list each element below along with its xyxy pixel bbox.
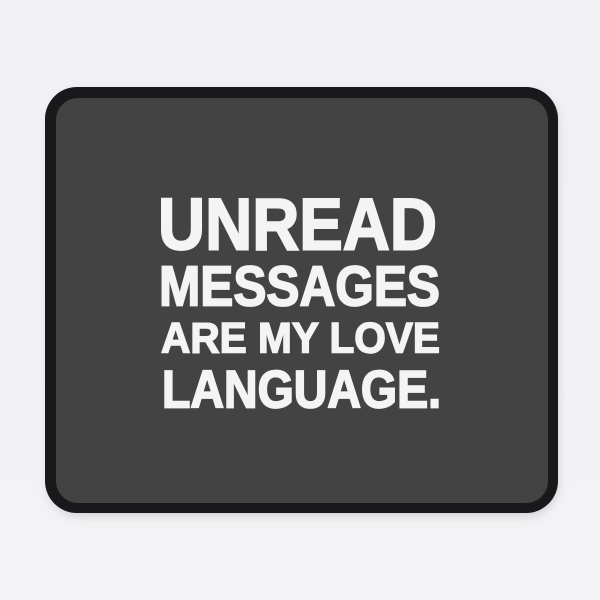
slogan text: [158, 184, 441, 420]
line: UNREAD: UNREAD: [158, 184, 437, 266]
mouse pad: [45, 87, 558, 516]
line: MESSAGES: MESSAGES: [159, 254, 440, 318]
pad shadow: [48, 92, 558, 516]
pad surface: [56, 98, 548, 503]
line: LANGUAGE.: LANGUAGE.: [162, 360, 441, 420]
pad stitched border: [45, 87, 558, 513]
line: ARE MY LOVE: ARE MY LOVE: [161, 314, 440, 362]
